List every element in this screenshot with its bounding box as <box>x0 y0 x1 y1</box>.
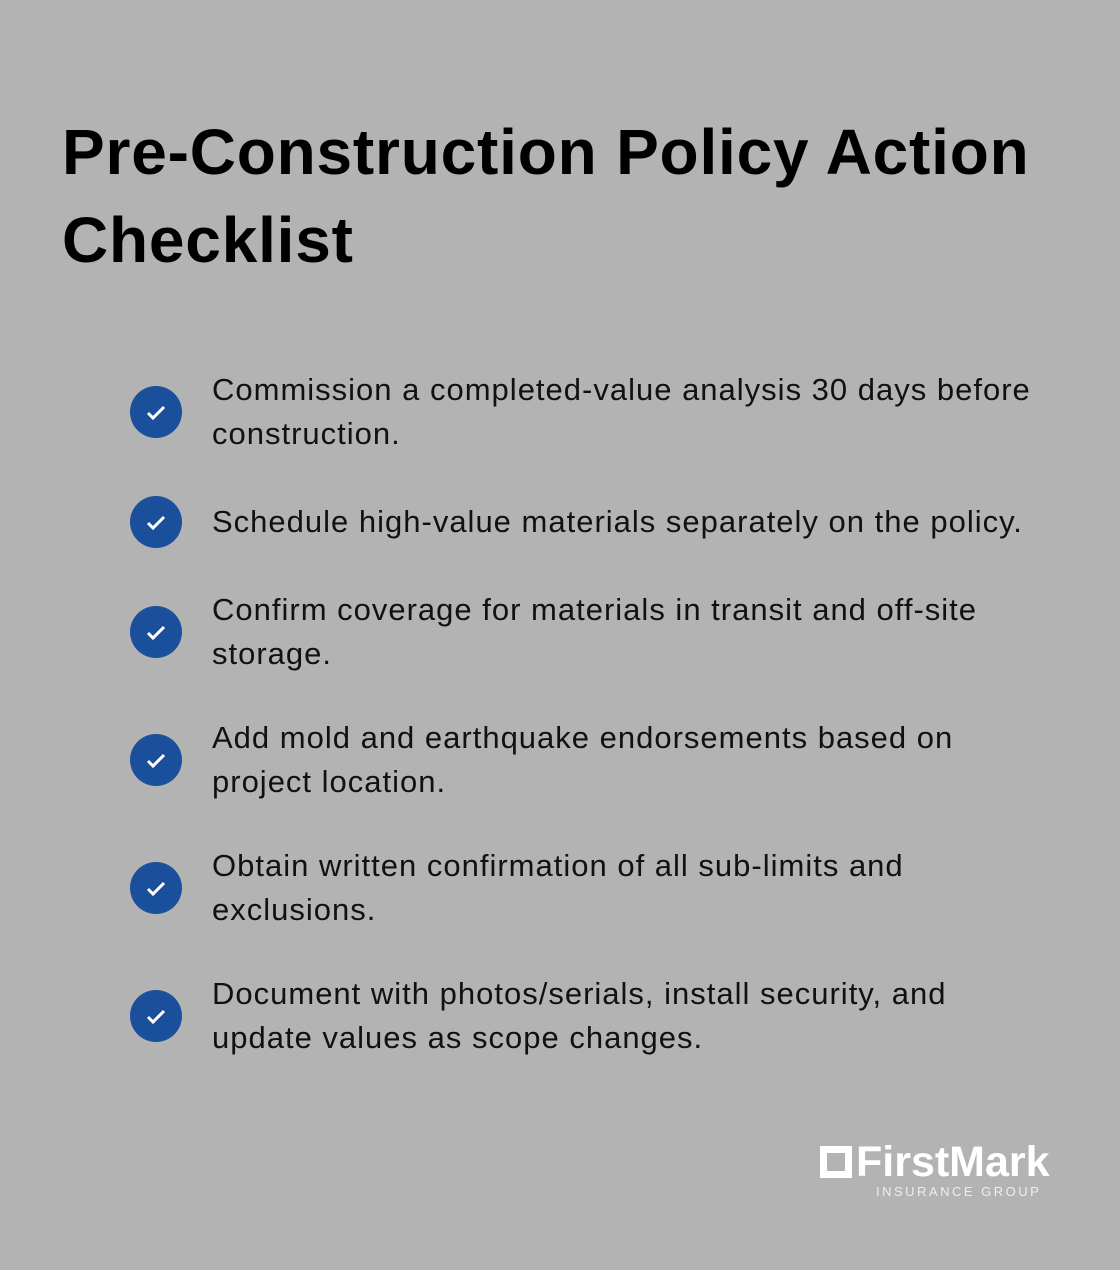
text 4 <box>212 720 953 799</box>
icon: check <box>130 386 182 438</box>
text 4: Add mold and earthquake endorsements based on <box>212 720 953 755</box>
item 4 <box>130 720 953 799</box>
title <box>62 116 1030 276</box>
text 2: Schedule high-value materials separately on the policy. <box>212 504 1023 539</box>
item 1 <box>130 372 1031 451</box>
logo mark <box>820 1146 852 1178</box>
text 1: construction. <box>212 416 401 451</box>
icon: check <box>130 606 182 658</box>
text 4: project location. <box>212 764 446 799</box>
icon: check <box>130 990 182 1042</box>
logo <box>820 1138 1050 1199</box>
text 1: Commission a completed-value analysis 30 days before <box>212 372 1031 407</box>
text 5: Obtain written confirmation of all sub-limits and <box>212 848 904 883</box>
text 5: exclusions. <box>212 892 376 927</box>
text 6 <box>212 976 946 1055</box>
logo text: FirstMark <box>856 1138 1050 1186</box>
logo subtitle: INSURANCE GROUP <box>876 1184 1041 1199</box>
item 6 <box>130 976 946 1055</box>
text 3: storage. <box>212 636 332 671</box>
icon: check <box>130 862 182 914</box>
item 2 <box>130 496 1023 548</box>
text 5 <box>212 848 904 927</box>
item 5 <box>130 848 904 927</box>
text 1 <box>212 372 1031 451</box>
text 3: Confirm coverage for materials in transit and off-site <box>212 592 977 627</box>
text 6: Document with photos/serials, install security, and <box>212 976 946 1011</box>
icon: check <box>130 734 182 786</box>
icon: check <box>130 496 182 548</box>
text 6: update values as scope changes. <box>212 1020 703 1055</box>
text 3 <box>212 592 977 671</box>
title: Checklist <box>62 204 354 276</box>
item 3 <box>130 592 977 671</box>
title: Pre-Construction Policy Action <box>62 116 1030 188</box>
